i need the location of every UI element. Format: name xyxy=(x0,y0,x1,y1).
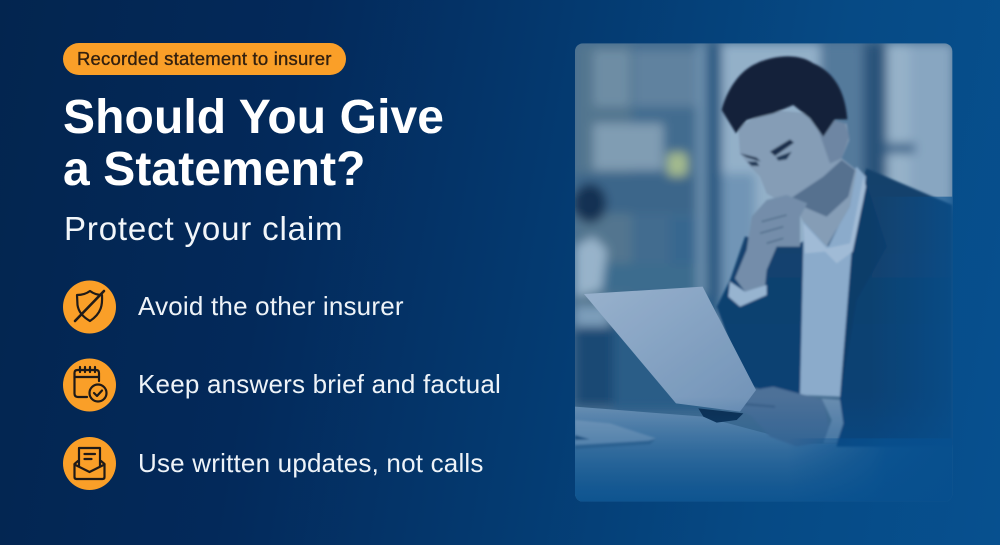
badge: recorded statement to insurer xyxy=(63,43,346,75)
list item: avoid the other insurer xyxy=(63,280,404,334)
cuff xyxy=(728,282,767,307)
label: Use written updates, not calls xyxy=(138,448,484,478)
desk xyxy=(575,406,834,464)
hand at chin xyxy=(735,195,807,292)
title: Should You Give xyxy=(63,91,444,144)
brows and eyes xyxy=(740,139,794,162)
shirt xyxy=(800,167,866,397)
subtitle: Protect your claim xyxy=(64,210,343,247)
blurred office background xyxy=(573,43,953,502)
list item: keep answers brief and factual xyxy=(63,358,501,412)
neck and face xyxy=(738,110,857,247)
paper document xyxy=(584,287,756,423)
photo: man reading a document at a desk xyxy=(575,43,952,502)
title xyxy=(63,91,444,196)
lower hand xyxy=(755,385,804,445)
blue fade overlays xyxy=(575,406,876,502)
man xyxy=(717,56,952,447)
laptop xyxy=(575,420,656,449)
jacket xyxy=(717,168,952,447)
list item: use written updates, not calls xyxy=(63,437,484,490)
label: Avoid the other insurer xyxy=(138,291,404,321)
icon: crossed-out shield xyxy=(63,280,116,334)
icon: open envelope with letter xyxy=(63,437,116,490)
label: Keep answers brief and factual xyxy=(138,369,501,399)
badge: recorded statement to insurer: Recorded statement to insurer xyxy=(77,48,332,69)
icon: calendar with check xyxy=(63,358,116,412)
hair xyxy=(722,56,847,137)
title: a Statement? xyxy=(63,143,366,196)
